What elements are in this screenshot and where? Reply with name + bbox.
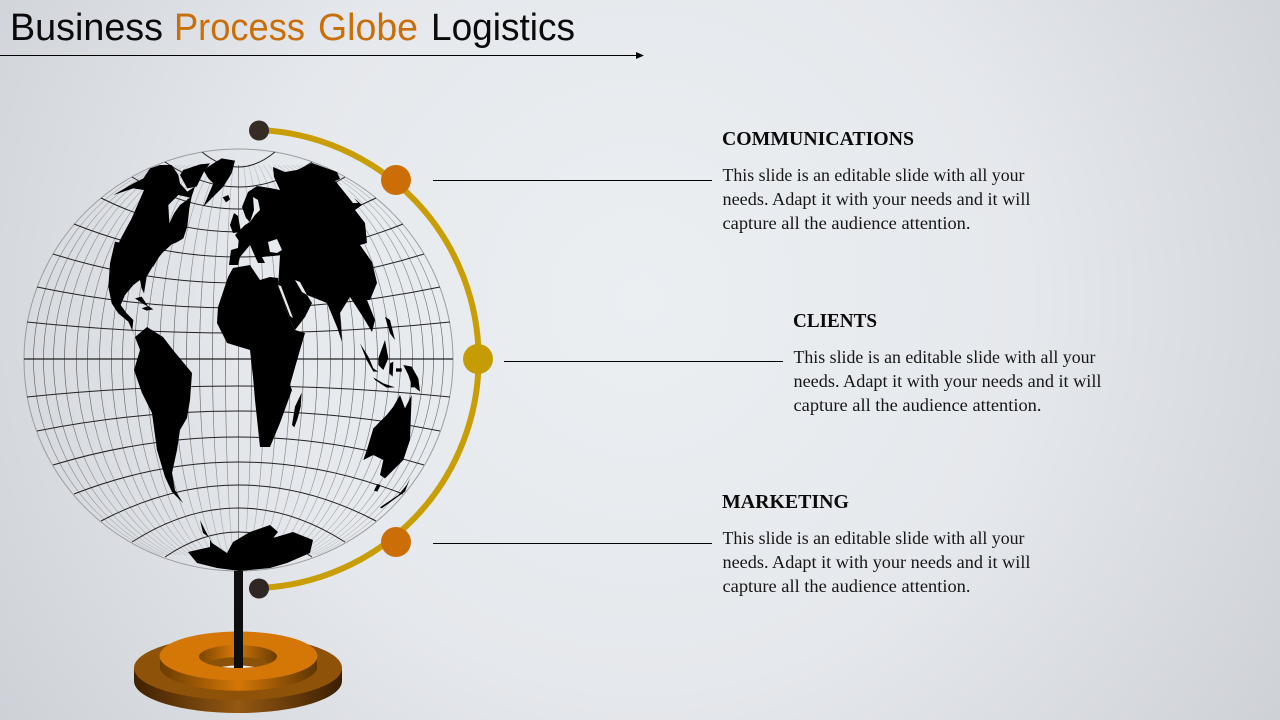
connector: clients: [504, 360, 783, 362]
panel: marketing: [722, 491, 1031, 596]
text: clients body: capture all the audience attention.: [794, 395, 1042, 415]
globe parallels: [24, 152, 453, 557]
text: marketing body: capture all the audience attention.: [722, 576, 970, 596]
text: communications body: needs. Adapt it with your needs and it will: [722, 189, 1031, 209]
arc: gold ring: [259, 130, 479, 588]
Australia: [363, 395, 412, 478]
title: [10, 7, 575, 49]
panel: communications: [722, 128, 1031, 233]
upper ring: [160, 632, 318, 691]
inland seas: [250, 183, 358, 318]
heading: marketing: MARKETING: [722, 491, 849, 513]
Madagascar: [292, 393, 302, 427]
text: communications body: This slide is an editable slide with all your: [722, 165, 1025, 185]
Eurasia: [229, 163, 377, 342]
node: clients: [463, 344, 493, 374]
node: communications: [381, 165, 411, 195]
text: marketing body: needs. Adapt it with your needs and it will: [722, 552, 1031, 572]
heading: communications: COMMUNICATIONS: [722, 128, 914, 150]
title: Logistics: [431, 7, 575, 49]
Asia-Pacific islands: [360, 317, 420, 392]
continents: [108, 158, 420, 571]
panel: clients: [793, 310, 1102, 415]
North America: [108, 158, 235, 337]
title: Globe: [318, 7, 418, 49]
node: marketing: [381, 527, 411, 557]
text: clients body: This slide is an editable slide with all your: [794, 347, 1096, 367]
node: bottom dark dot: [249, 578, 269, 598]
node: top dark dot: [249, 120, 269, 140]
connector: marketing: [433, 542, 712, 544]
text: marketing body: [722, 528, 1031, 596]
Antarctica: [188, 520, 313, 571]
text: communications body: capture all the audience attention.: [722, 213, 970, 233]
South America: [134, 327, 192, 503]
globe stand base: [134, 571, 342, 713]
globe meridians: [24, 149, 453, 571]
text: communications body: [722, 165, 1031, 233]
lower disc: [134, 636, 342, 713]
globe: [24, 149, 453, 571]
title: Process: [174, 7, 305, 49]
title: Business: [10, 7, 163, 49]
text: clients body: [794, 347, 1102, 415]
Africa: [217, 265, 305, 447]
connector: communications: [433, 180, 712, 182]
text: clients body: needs. Adapt it with your needs and it will: [794, 371, 1102, 391]
United Kingdom: [230, 213, 241, 233]
arrow: title underline: [0, 52, 644, 59]
heading: clients: CLIENTS: [793, 310, 877, 332]
text: marketing body: This slide is an editable slide with all your: [722, 528, 1025, 548]
stand pole: [234, 571, 243, 668]
